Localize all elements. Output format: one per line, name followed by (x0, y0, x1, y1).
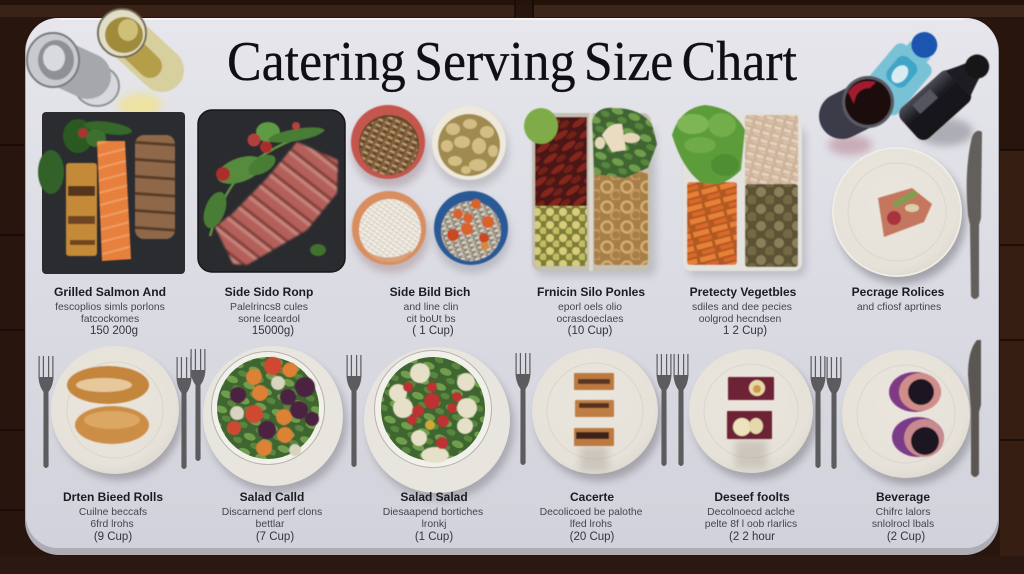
icon: plate with purple desserts (842, 350, 974, 485)
icon: salad bowl with cucumbers (364, 347, 514, 500)
column 7 labels: Cuilne beccafs (79, 507, 147, 518)
column 12 labels: Beverage (876, 490, 930, 504)
column 4 labels: Frnicin Silo Ponles (537, 285, 645, 299)
icon: herb garnish (199, 122, 326, 256)
column 5 labels: oolgrod hecndsen (699, 314, 782, 325)
column 7 labels: (9 Cup) (94, 531, 132, 543)
column 8 labels: Discarnend perf clons (222, 507, 322, 518)
column 9 labels: lronkj (422, 519, 446, 530)
column 7 labels (63, 490, 163, 543)
icon: fork (346, 355, 362, 467)
column 8 labels: bettlar (256, 519, 285, 530)
column 11 labels: pelte 8f l oob rlarlics (705, 519, 797, 530)
bread roll bottom (75, 406, 149, 444)
icon: herb garnish (38, 119, 133, 194)
column 2 labels: 15000g) (252, 325, 294, 337)
column 10 labels: Cacerte (570, 490, 614, 504)
column 5 labels: Pretecty Vegetbles (690, 285, 797, 299)
icon: plate with appetizer (832, 147, 966, 284)
column 7 labels: 6frd lrohs (90, 519, 134, 530)
column 6 labels: and cfiosf aprtines (857, 302, 941, 313)
column 3 labels (390, 285, 470, 337)
column 11 labels: Decolnoecd aclche (707, 507, 795, 518)
icon: knife top (967, 131, 982, 299)
icon: fork (38, 356, 54, 468)
column 5 labels (690, 285, 797, 337)
column 1 labels (54, 285, 166, 337)
column 10 labels: lfed lrohs (570, 519, 612, 530)
column 3 labels: ( 1 Cup) (412, 325, 454, 337)
salmon fillet grilled (135, 135, 175, 239)
panel: vegetable tray (672, 105, 806, 276)
icon: salad bowl with tomatoes (203, 346, 347, 493)
mushrooms (745, 184, 798, 267)
column 9 labels (383, 490, 483, 543)
column 9 labels: Salad Salad (400, 490, 468, 504)
lettuce (672, 105, 745, 184)
green salad (592, 108, 657, 178)
column 3 labels: cit boUt bs (406, 314, 456, 325)
column 12 labels: (2 Cup) (887, 531, 925, 543)
column 3 labels: Side Bild Bich (390, 285, 470, 299)
icon: plate with dessert squares (689, 349, 817, 480)
column 7 labels: Drten Bieed Rolls (63, 490, 163, 504)
column 5 labels: sdiles and dee pecies (692, 302, 792, 313)
column 6 labels: Pecrage Rolices (852, 285, 945, 299)
icon: water glass (27, 33, 119, 106)
column 10 labels (540, 490, 643, 543)
icon: red wine glass (828, 76, 894, 155)
column 1 labels: 150 200g (90, 325, 138, 337)
column 1 labels: fatcockomes (81, 314, 139, 325)
column 1 labels: Grilled Salmon And (54, 285, 166, 299)
icon: pair of forks (810, 356, 842, 469)
column 8 labels (222, 490, 322, 543)
icon: dark bottle (895, 44, 1000, 146)
column 9 labels: Diesaapend bortiches (383, 507, 483, 518)
icon: pair of forks (656, 354, 688, 466)
red beans (535, 117, 587, 206)
column 6 labels (852, 285, 945, 313)
steak slices (215, 142, 338, 265)
column 4 labels: (10 Cup) (568, 325, 613, 337)
icon: pair of forks (176, 349, 206, 469)
icon: bowl of nuts (432, 106, 509, 188)
column 10 labels: Decolicoed be palothe (540, 507, 643, 518)
column 2 labels: sone lceardol (238, 314, 300, 325)
column 12 labels: snlolrocl lbals (872, 519, 934, 530)
panel: steak board (198, 110, 345, 272)
column 12 labels (872, 490, 934, 543)
column 2 labels: Palelrincs8 cules (230, 302, 308, 313)
salmon fillet left (66, 163, 97, 256)
column 1 labels: fescoplios simls porlons (55, 302, 165, 313)
column 8 labels: Salad Calld (240, 490, 304, 504)
bread roll top (67, 366, 149, 404)
column 10 labels: (20 Cup) (570, 531, 615, 543)
icon: knife bottom (968, 340, 981, 477)
panel: grilled salmon board (38, 112, 185, 274)
column 11 labels: Deseef foolts (714, 490, 790, 504)
column 12 labels: Chifrc lalors (876, 507, 930, 518)
column 4 labels: ocrasdoeclaes (556, 314, 624, 325)
garnish leaves (524, 108, 558, 144)
icon: plate with bread rolls (51, 346, 182, 480)
carrots (687, 182, 737, 265)
icon: bowl of grains (351, 105, 428, 188)
column 4 labels: eporl oels olio (558, 302, 622, 313)
title: Catering Serving Size Chart (227, 31, 797, 93)
icon: bowl of vegetables (434, 191, 510, 273)
icon: glass of white wine (98, 9, 162, 117)
column 3 labels: and line clin (404, 302, 459, 313)
pasta (594, 172, 648, 265)
icon: bowl of rice (352, 191, 429, 273)
icon: plate with cake slices (532, 348, 662, 481)
icon: fork (516, 353, 530, 465)
column 8 labels: (7 Cup) (256, 531, 294, 543)
shredded tuna (745, 115, 798, 185)
column 5 labels: 1 2 Cup) (723, 325, 767, 337)
column 11 labels: (2 2 hour (729, 531, 775, 543)
icon: blue water bottle (859, 21, 951, 119)
column 4 labels (537, 285, 645, 337)
column 11 labels (705, 490, 797, 543)
salmon fillet centre (97, 141, 131, 261)
column 9 labels: (1 Cup) (415, 531, 453, 543)
column 2 labels (225, 285, 313, 337)
panel: side dish tray (524, 108, 657, 276)
yellow beans (535, 206, 587, 266)
column 2 labels: Side Sido Ronp (225, 285, 313, 299)
